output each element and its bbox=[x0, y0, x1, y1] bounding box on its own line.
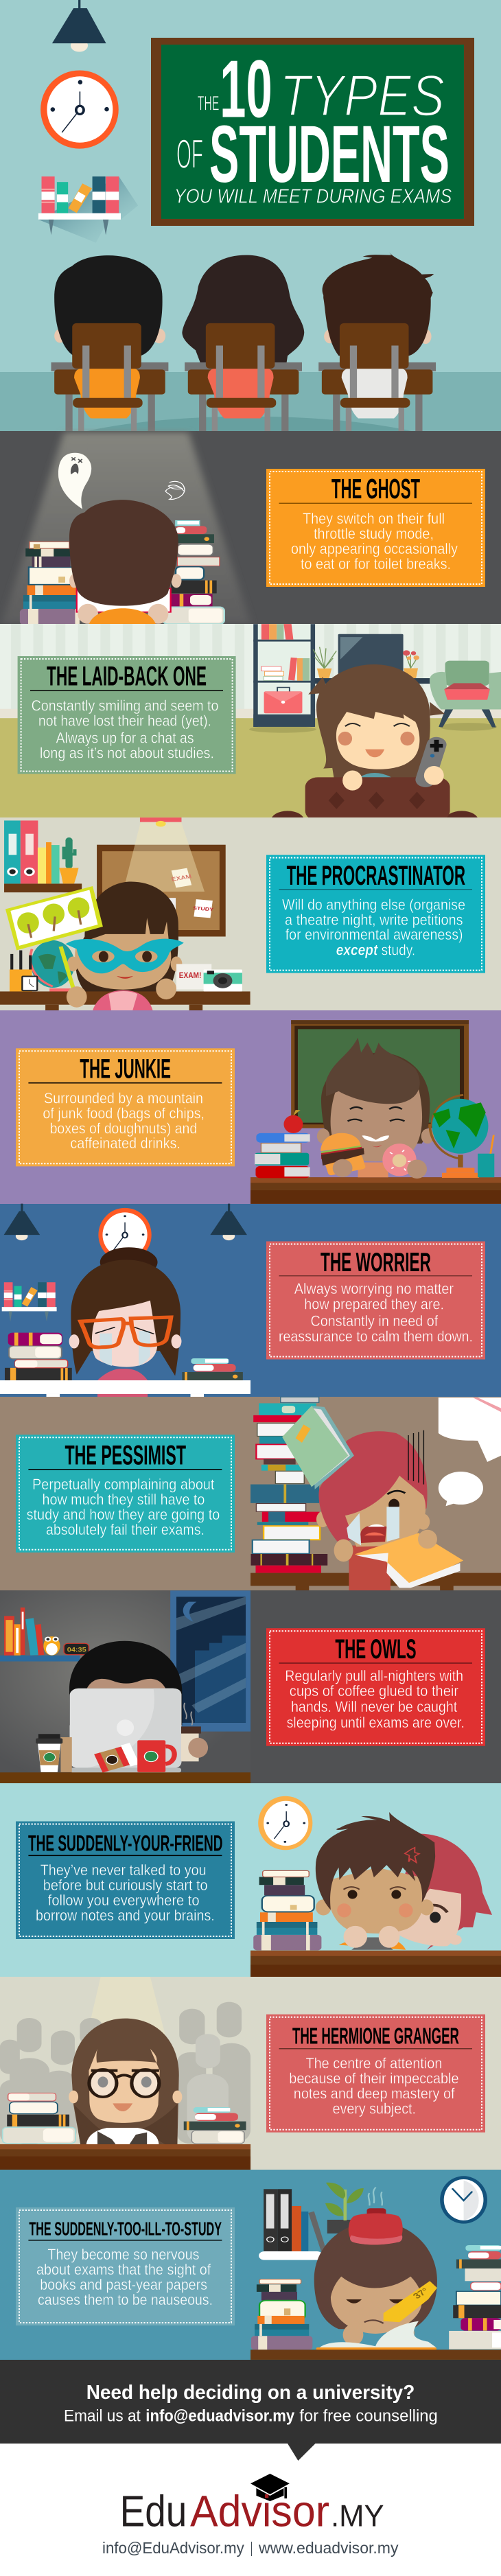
body text: to eat or for toilet breaks. bbox=[301, 555, 451, 572]
panel: call to action bbox=[0, 2360, 501, 2461]
book stack right bbox=[163, 520, 224, 624]
icon: hot water bag bbox=[349, 2188, 403, 2244]
student from behind bbox=[69, 500, 181, 625]
heading: THE LAID-BACK ONE bbox=[47, 662, 207, 692]
icon: scribble bbox=[165, 481, 185, 500]
body text: boxes of doughnuts) and bbox=[50, 1119, 197, 1137]
desk bbox=[250, 1951, 501, 1978]
book stack left bbox=[3, 2093, 75, 2144]
student behind laptop bbox=[69, 1641, 182, 1773]
card: the owls bbox=[266, 1628, 485, 1746]
girl with glasses bbox=[69, 2019, 182, 2145]
panel: the pessimist bbox=[0, 1397, 501, 1592]
subtitle: YOU WILL MEET DURING EXAMS bbox=[174, 186, 452, 208]
illustration: sick student with thermometer bbox=[250, 2176, 501, 2360]
body text: because of their impeccable bbox=[289, 2069, 458, 2087]
body text: They’ve never talked to you bbox=[40, 1861, 207, 1879]
icon: ceiling lamp bbox=[52, 0, 106, 52]
illustration: two students at desk bbox=[250, 1796, 501, 1978]
body text bbox=[32, 697, 218, 761]
body text: Constantly smiling and seem to bbox=[32, 697, 218, 714]
icon: burger bbox=[321, 1133, 366, 1176]
icon: doughnut bbox=[382, 1144, 417, 1176]
body text: Will do anything else (organise bbox=[282, 896, 465, 914]
right book stack bbox=[449, 2245, 501, 2349]
silhouette crowd bbox=[0, 2002, 250, 2145]
text: email line: info@eduadvisor.my bbox=[145, 2407, 295, 2426]
panel: the junkie bbox=[0, 1010, 501, 1204]
illustration: student with ghost bbox=[1, 432, 250, 625]
open orange book bbox=[334, 1530, 463, 1588]
body text: caffeinated drinks. bbox=[70, 1135, 180, 1152]
body text: of junk food (bags of chips, bbox=[43, 1105, 205, 1122]
desk bbox=[0, 2144, 250, 2170]
card: the hermione granger bbox=[266, 2015, 485, 2133]
body text bbox=[36, 2246, 213, 2308]
icon: wall clock bbox=[258, 1796, 312, 1850]
worried student bbox=[69, 1247, 181, 1380]
body text: except study. bbox=[336, 942, 415, 959]
shelf with binders bbox=[4, 820, 82, 892]
body text: hands. Will never be caught bbox=[291, 1698, 457, 1715]
icon: floor rug bbox=[25, 417, 473, 510]
body text: Surrounded by a mountain bbox=[44, 1089, 203, 1106]
body text: for environmental awareness) bbox=[286, 926, 463, 943]
book stack right bbox=[184, 2107, 246, 2144]
body text bbox=[279, 1280, 473, 1345]
sofa with smiling student bbox=[271, 664, 478, 830]
student: long hair with coral shirt bbox=[182, 255, 304, 432]
body text: books and past-year papers bbox=[40, 2276, 207, 2293]
illustration: student eating at desk bbox=[250, 1020, 501, 1204]
spotlight bbox=[86, 1977, 166, 2039]
body text: absolutely fail their exams. bbox=[46, 1521, 205, 1538]
masked student bbox=[65, 882, 184, 993]
book stack left bbox=[20, 542, 80, 625]
boy student bbox=[316, 1812, 435, 1950]
panel: the hermione granger bbox=[0, 1977, 501, 2170]
body text: how much they still have to bbox=[43, 1491, 205, 1508]
title: TYPES: TYPES bbox=[279, 64, 445, 129]
chalkboard title bbox=[151, 38, 474, 226]
panel: the suddenly-too-ill-to-study bbox=[0, 2170, 501, 2360]
illustration: classroom wall and students bbox=[25, 0, 473, 510]
footer: logo and contacts bbox=[102, 2474, 399, 2557]
body text: only appearing occasionally bbox=[291, 540, 458, 557]
body text: long as it’s not about studies. bbox=[40, 744, 214, 761]
student: messy hair with white shirt bbox=[318, 253, 436, 432]
icon: thermometer bbox=[384, 2281, 437, 2322]
body text bbox=[285, 1667, 465, 1731]
card: the worrier bbox=[266, 1241, 485, 1359]
desk bbox=[250, 1177, 501, 1204]
text: email line: for free counselling bbox=[299, 2407, 438, 2426]
book stack right bbox=[182, 1358, 243, 1381]
icon: falling green book bbox=[282, 1406, 354, 1489]
text: email line bbox=[64, 2407, 438, 2426]
heading: THE OWLS bbox=[335, 1634, 417, 1664]
sign with trees bbox=[5, 886, 103, 989]
body text: study and how they are going to bbox=[27, 1506, 220, 1523]
body text: They switch on their full bbox=[303, 510, 445, 527]
lamp beam bbox=[123, 817, 205, 892]
card: the pessimist bbox=[16, 1435, 235, 1553]
red-haired student behind bbox=[396, 1834, 492, 1950]
logo wordmark: .MY bbox=[331, 2500, 384, 2533]
body text: follow you everywhere to bbox=[48, 1892, 199, 1909]
book stack with apple bbox=[255, 1110, 310, 1178]
crying student bbox=[316, 1430, 430, 1546]
panel: the ghost bbox=[0, 431, 501, 625]
body text bbox=[36, 1861, 215, 1924]
body text: not have lost their head (yet). bbox=[38, 712, 211, 729]
cork board: STUDY bbox=[193, 905, 214, 912]
body text: every subject. bbox=[333, 2100, 416, 2117]
contact line bbox=[102, 2539, 399, 2557]
icon: paper edge bbox=[473, 1397, 501, 1412]
body text: Always worrying no matter bbox=[294, 1280, 454, 1297]
illustration: living room bbox=[0, 624, 501, 830]
illustration: crying student with tall stack bbox=[250, 1397, 501, 1592]
floor bbox=[0, 709, 501, 818]
open book and hands bbox=[316, 2321, 436, 2351]
globe and desk items bbox=[10, 940, 74, 992]
title: 10: 10 bbox=[220, 43, 272, 135]
heading: THE PESSIMIST bbox=[65, 1440, 186, 1470]
icon: thermometer: 37° bbox=[411, 2286, 431, 2301]
text: email line: Email us at bbox=[64, 2407, 141, 2426]
night window bbox=[170, 1590, 250, 1732]
cork board: EXAM bbox=[171, 873, 192, 883]
card: the suddenly-too-ill-to-study bbox=[16, 2207, 235, 2325]
icon: wall clock bbox=[98, 1208, 152, 1262]
desk and body bbox=[250, 1546, 501, 1592]
heading: THE SUDDENLY-YOUR-FRIEND bbox=[28, 1831, 222, 1855]
student: black hair with orange shirt bbox=[51, 255, 168, 432]
body text: reassurance to calm them down. bbox=[279, 1327, 473, 1345]
card: the ghost bbox=[266, 469, 485, 587]
icon: lamp left bbox=[4, 1204, 40, 1240]
icon: flying paper bbox=[439, 1397, 501, 1462]
panel: header classroom bbox=[0, 0, 501, 510]
contact line: www.eduadvisor.my bbox=[258, 2539, 399, 2557]
desk and student body bbox=[0, 979, 250, 1011]
desk bbox=[0, 1772, 250, 1783]
icon: graduation cap bbox=[250, 2474, 290, 2501]
heading: THE JUNKIE bbox=[80, 1054, 171, 1084]
body text bbox=[282, 896, 465, 959]
body text bbox=[291, 510, 458, 572]
shelf with books, owl and clock bbox=[0, 1608, 89, 1662]
coffee cups bbox=[36, 1703, 208, 1774]
body text: They become so nervous bbox=[47, 2246, 200, 2263]
card: the laid-back one bbox=[18, 656, 236, 774]
panel: the owls bbox=[0, 1590, 501, 1783]
body text: Perpetually complaining about bbox=[32, 1476, 214, 1493]
book stack left bbox=[5, 1333, 72, 1381]
icon: globe and cup bbox=[430, 1095, 494, 1178]
card: the junkie bbox=[16, 1048, 235, 1166]
card: the suddenly-your-friend bbox=[16, 1822, 235, 1939]
blackboard bbox=[291, 1020, 469, 1128]
illustration: crying student with glasses bbox=[0, 1204, 250, 1397]
body text: how prepared they are. bbox=[304, 1295, 444, 1312]
body text bbox=[43, 1089, 205, 1152]
body text: about exams that the sight of bbox=[36, 2261, 211, 2278]
exam calendar and camera: EXAM! bbox=[179, 971, 201, 979]
book stack bbox=[253, 1870, 321, 1950]
icon: speech bubble bbox=[439, 1472, 483, 1506]
icon: ghost bbox=[58, 453, 91, 509]
tall book stack bbox=[250, 1397, 327, 1573]
illustration: all-nighter student with laptop bbox=[0, 1590, 250, 1783]
icon: bookshelf bbox=[2, 1282, 57, 1322]
body text: borrow notes and your brains. bbox=[36, 1907, 215, 1924]
heading: need help: Need help deciding on a university? bbox=[86, 2382, 415, 2404]
body text: causes them to be nauseous. bbox=[38, 2291, 213, 2308]
left book stack bbox=[251, 2279, 312, 2349]
title: THE: THE bbox=[198, 93, 219, 115]
panel: the procrastinator bbox=[0, 817, 501, 1011]
logo wordmark bbox=[120, 2487, 384, 2536]
bookcase bbox=[253, 624, 315, 727]
card: the procrastinator bbox=[266, 855, 485, 973]
body text: Constantly in need of bbox=[310, 1312, 439, 1330]
icon: wall clock bbox=[440, 2176, 487, 2224]
contact line: info@EduAdvisor.my bbox=[102, 2539, 244, 2557]
body text: Always up for a chat as bbox=[56, 730, 194, 747]
heading: THE GHOST bbox=[331, 473, 420, 504]
logo wordmark: Edu bbox=[120, 2487, 187, 2536]
panel: the suddenly-your-friend bbox=[0, 1783, 501, 1978]
sick student bbox=[314, 2222, 437, 2334]
body text: a theatre night, write petitions bbox=[285, 911, 463, 928]
shelf with binders and plant bbox=[259, 2183, 364, 2260]
body text: throttle study mode, bbox=[314, 525, 434, 542]
body text: sleeping until exams are over. bbox=[287, 1714, 465, 1731]
body text: The centre of attention bbox=[306, 2054, 442, 2072]
shelf with books, owl and clock: 04:35 bbox=[67, 1647, 86, 1653]
television and sideboard bbox=[313, 634, 430, 684]
icon: bookshelf bbox=[38, 176, 138, 243]
body text: cups of coffee glued to their bbox=[290, 1682, 458, 1699]
chalkboard title: OF bbox=[176, 131, 203, 177]
body text bbox=[27, 1476, 220, 1538]
heading: THE SUDDENLY-TOO-ILL-TO-STUDY bbox=[29, 2218, 222, 2240]
body text: Regularly pull all-nighters with bbox=[285, 1667, 463, 1684]
exam calendar and camera bbox=[176, 964, 242, 991]
logo wordmark: Advisor bbox=[190, 2487, 329, 2536]
white desk bbox=[0, 1380, 250, 1397]
icon: wall clock bbox=[40, 70, 119, 149]
illustration: girl with glasses and crowd bbox=[0, 1977, 250, 2170]
body text: notes and deep mastery of bbox=[294, 2085, 455, 2102]
body text bbox=[289, 2054, 458, 2117]
panel: the worrier bbox=[0, 1204, 501, 1397]
armchair bbox=[430, 661, 501, 728]
illustration: masked student with sign bbox=[0, 817, 250, 1011]
student eating bbox=[317, 1038, 434, 1177]
cork board bbox=[97, 845, 226, 936]
spotlight bbox=[1, 432, 250, 624]
desk bbox=[250, 2349, 501, 2360]
body text: before but curiously start to bbox=[43, 1877, 208, 1894]
icon: lamp right bbox=[210, 1204, 247, 1240]
panel: the laid-back one bbox=[0, 624, 501, 830]
